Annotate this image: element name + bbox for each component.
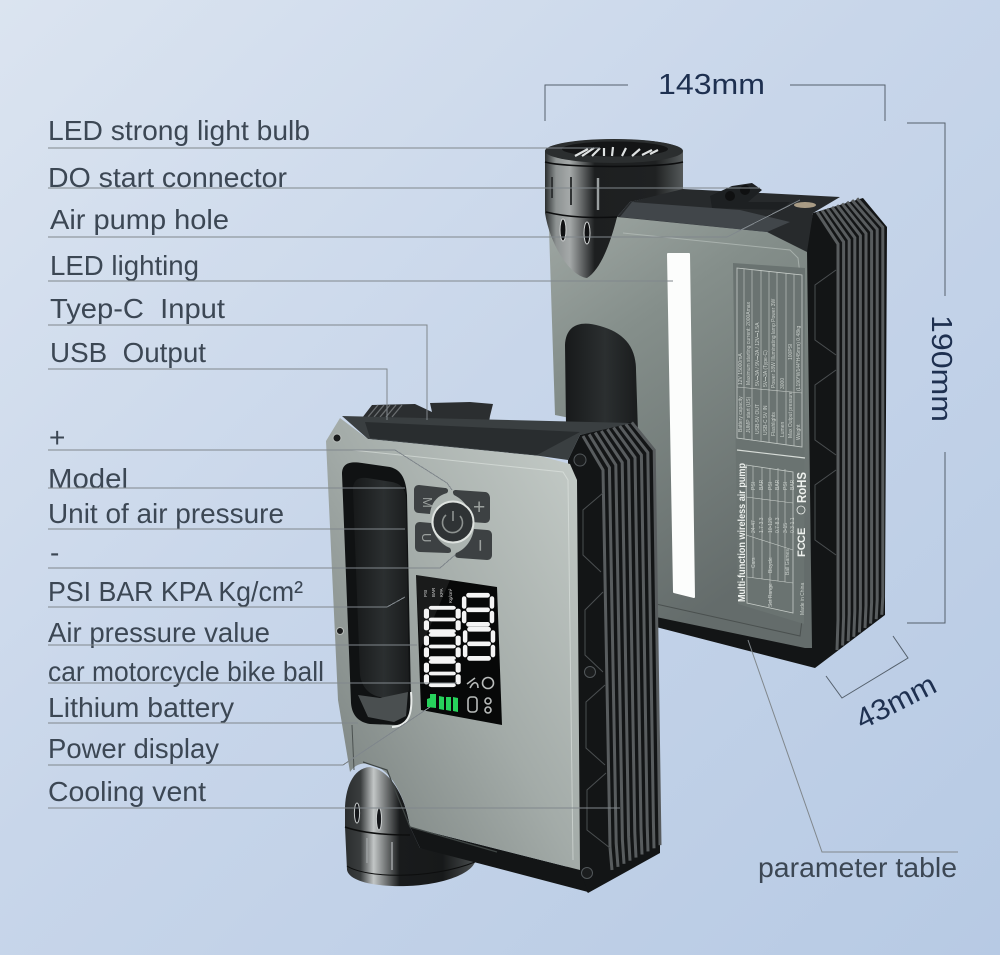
upper table — [737, 268, 802, 447]
LED light strip — [668, 254, 694, 597]
lower table: 0.3-1.1 — [790, 517, 796, 533]
upper table: USB-5V OUT — [755, 404, 761, 434]
front side rail — [567, 422, 660, 893]
label: Lithium battery: Lithium battery — [48, 692, 234, 723]
upper table: Weight — [796, 424, 802, 440]
rear device (back view with parameter table) — [545, 139, 887, 668]
callout: parameter table: parameter table — [758, 852, 957, 883]
lower table: 0.7-8.3 — [775, 517, 781, 533]
label: Model: Model — [48, 463, 128, 494]
certification marks: FC — [796, 542, 808, 557]
plate title: Multi-function wireless air pump — [736, 463, 748, 602]
vehicle icons — [467, 678, 494, 713]
screen units: KPA — [439, 588, 444, 597]
label: Tyep-C Input — [48, 293, 427, 420]
dimension: width 143mm — [545, 69, 885, 121]
LCD screen — [416, 575, 502, 725]
lower table: BAR — [775, 479, 781, 490]
screws — [333, 434, 596, 878]
upper table: Flashlights — [771, 412, 777, 436]
certification marks: RoHS — [794, 472, 809, 503]
battery level — [427, 694, 458, 712]
front top face — [342, 416, 632, 460]
certification marks: CE — [796, 528, 808, 543]
made in china: Made in China — [800, 583, 806, 615]
front lens head — [345, 767, 475, 886]
label: minus — [48, 537, 455, 568]
screen units: BAR — [431, 587, 436, 597]
dimension: depth 43mm: 43mm — [851, 669, 942, 736]
label: PSI BAR KPA Kg/cm2: PSI BAR KPA Kg/cm² — [48, 576, 303, 607]
label: minus: - — [50, 537, 59, 568]
dimension: depth 43mm — [826, 636, 942, 736]
lower table: PSI — [768, 482, 774, 490]
upper table: (L190*W144*H45mm) 0.48kg — [796, 325, 802, 391]
label: Air pump hole — [48, 200, 800, 237]
rear device top face — [617, 183, 840, 252]
front bottom bevel — [410, 827, 588, 892]
lower table: BAR — [759, 479, 765, 490]
label: USB Output — [48, 337, 387, 420]
upper table: Lumen — [780, 421, 786, 437]
front panel — [326, 418, 580, 870]
upper table: Power 18W Illuminating lamp Power 3W — [771, 299, 777, 388]
lower table: PSI — [783, 482, 789, 490]
label: car motorcycle bike ball: car motorcycle bike ball — [48, 656, 324, 687]
dimension: width 143mm: 143mm — [658, 69, 765, 101]
upper table: Battery capacity — [738, 396, 744, 432]
screen units: PSI — [423, 590, 428, 597]
rear device side rail — [656, 198, 887, 668]
label: plus: + — [49, 422, 65, 453]
pressure digits — [426, 595, 493, 685]
control buttons — [414, 485, 493, 560]
lower table: 1.7-3.3 — [759, 517, 765, 533]
label: DO start connector: DO start connector — [48, 162, 287, 193]
rear device front panel — [548, 198, 812, 648]
lower table: PSI — [751, 482, 757, 490]
screen units: Kg/cm² — [448, 588, 453, 603]
label: Power display: Power display — [48, 733, 219, 764]
button: minus: − — [468, 539, 493, 552]
label: USB Output: USB Output — [50, 337, 206, 368]
upper table: Maximum starting current: 2000Amax — [746, 301, 752, 385]
upper table: 5V⎓3A / 9V⎓2A / 12V⎓1.5A — [755, 322, 761, 386]
certification marks — [794, 472, 809, 557]
parameter plate — [733, 263, 809, 624]
label: Power display — [48, 707, 430, 765]
front panel bevel — [352, 450, 573, 860]
lower table — [746, 465, 796, 613]
upper table: JUMP start (US) — [746, 396, 752, 433]
lower table: Ball Games — [785, 549, 791, 575]
label: Cooling vent: Cooling vent — [48, 776, 206, 807]
button: plus: + — [473, 496, 485, 519]
label: LED lighting: LED lighting — [50, 250, 199, 281]
front device (display and buttons view) — [326, 402, 660, 893]
rear device ribs — [815, 198, 883, 650]
screen units — [423, 587, 453, 603]
plate divider — [737, 450, 805, 458]
lower table: Bicycle — [768, 557, 774, 573]
upper table: 5V⎓3A (Type-C) — [763, 350, 769, 387]
callout: parameter table — [748, 640, 958, 883]
rear grip recess — [565, 324, 638, 432]
label: Tyep-C Input: Tyep-C Input — [50, 293, 225, 324]
button: unit: U — [419, 533, 434, 542]
lower table: Set Range — [768, 583, 774, 607]
label: plus — [48, 422, 452, 490]
lower table: 10-120 — [768, 517, 774, 533]
lower table: 3-15 — [783, 523, 789, 533]
label: Unit of air pressure: Unit of air pressure — [48, 498, 284, 529]
upper table: 100PSI — [788, 344, 794, 360]
upper table: 12V 15000mA — [738, 353, 744, 385]
dimension: height 190mm: 190mm — [925, 315, 957, 422]
lower table: Cars — [751, 557, 757, 568]
rear panel bevel — [623, 233, 803, 300]
lower table: 24-47 — [751, 520, 757, 533]
upper table: 3000 — [780, 378, 786, 389]
upper table: USB-C 5V IN — [763, 405, 769, 435]
button: mode: M — [420, 497, 435, 508]
front ribs — [583, 422, 660, 870]
label: Air pressure value: Air pressure value — [48, 617, 270, 648]
top connectors — [362, 402, 493, 428]
lower table: BAR — [790, 479, 796, 490]
upper table: Max Output pressure — [788, 391, 794, 438]
label: Air pump hole: Air pump hole — [50, 204, 229, 235]
dimension: height 190mm — [907, 123, 957, 623]
rear lens head — [545, 139, 683, 278]
grip recess — [342, 462, 411, 727]
power button — [432, 502, 474, 542]
label: LED strong light bulb: LED strong light bulb — [48, 115, 310, 146]
